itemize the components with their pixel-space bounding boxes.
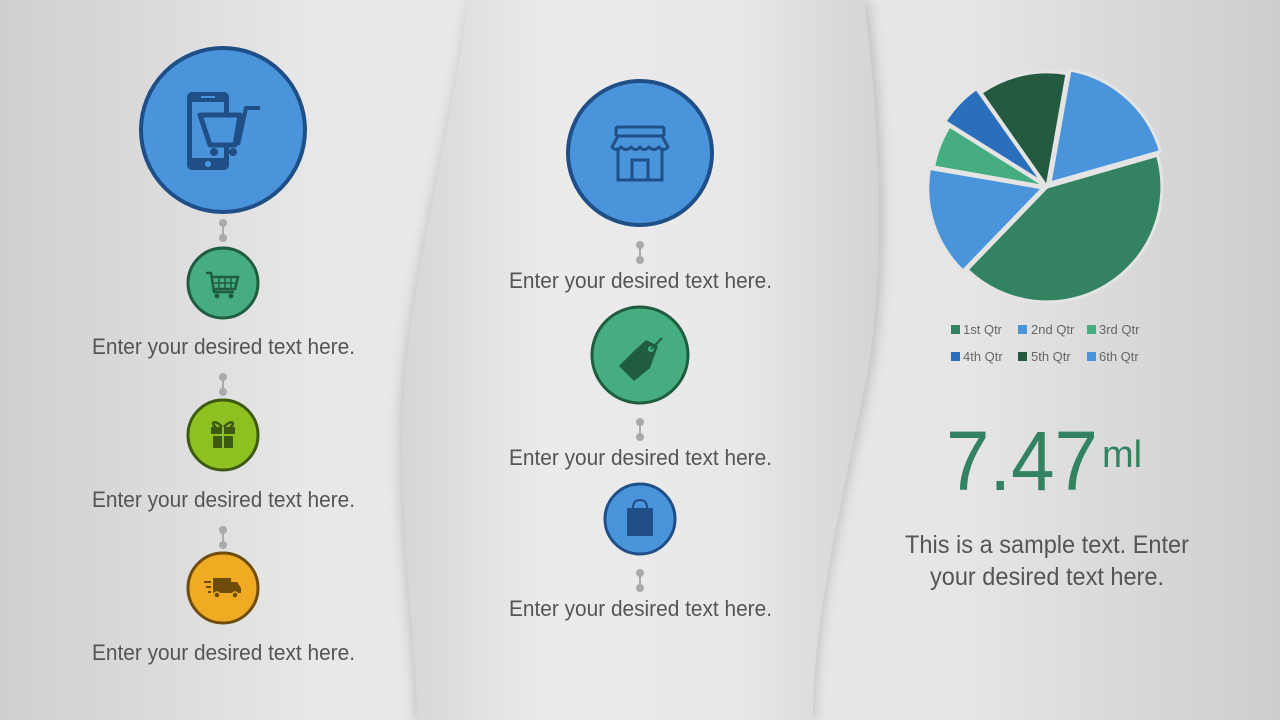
legend: 3rd Qtr bbox=[1099, 322, 1140, 337]
middle column bbox=[509, 81, 772, 621]
connector bbox=[636, 241, 644, 264]
slice: 6th Qtr bbox=[928, 168, 1043, 271]
text: Enter your desired text here. bbox=[92, 334, 355, 359]
legend: 4th Qtr bbox=[963, 349, 1003, 364]
icon: delivery truck bbox=[188, 553, 258, 623]
slice: 1st Qtr bbox=[967, 155, 1162, 302]
legend: 2nd Qtr bbox=[1031, 322, 1075, 337]
icon: price tag bbox=[592, 307, 688, 403]
pie chart bbox=[928, 70, 1162, 302]
legend: 6th Qtr bbox=[1099, 349, 1139, 364]
description text: your desired text here. bbox=[930, 563, 1164, 591]
slice: 4th Qtr bbox=[945, 88, 1043, 183]
left column bbox=[92, 48, 355, 665]
text: Enter your desired text here. bbox=[509, 596, 772, 621]
icon: store bbox=[568, 81, 712, 225]
text: Enter your desired text here. bbox=[92, 487, 355, 512]
description text bbox=[905, 531, 1189, 591]
connector bbox=[219, 219, 227, 242]
connector bbox=[636, 569, 644, 592]
description text: This is a sample text. Enter bbox=[905, 531, 1189, 559]
icon: shopping bag bbox=[605, 484, 675, 554]
legend: 5th Qtr bbox=[1031, 349, 1071, 364]
connector bbox=[219, 373, 227, 396]
slice: 2nd Qtr bbox=[1050, 70, 1160, 183]
connector bbox=[636, 418, 644, 441]
text: Enter your desired text here. bbox=[92, 640, 355, 665]
legend: 1st Qtr bbox=[963, 322, 1003, 337]
slice: 3rd Qtr bbox=[934, 126, 1047, 187]
slice: 5th Qtr bbox=[981, 72, 1067, 187]
legend bbox=[951, 322, 1140, 364]
icon: mobile shopping bbox=[141, 48, 305, 212]
big number: ml bbox=[1102, 434, 1142, 476]
icon: cart bbox=[188, 248, 258, 318]
big number: 7.47 bbox=[946, 414, 1098, 508]
text: Enter your desired text here. bbox=[509, 445, 772, 470]
text: Enter your desired text here. bbox=[509, 268, 772, 293]
connector bbox=[219, 526, 227, 549]
icon: gift bbox=[188, 400, 258, 470]
